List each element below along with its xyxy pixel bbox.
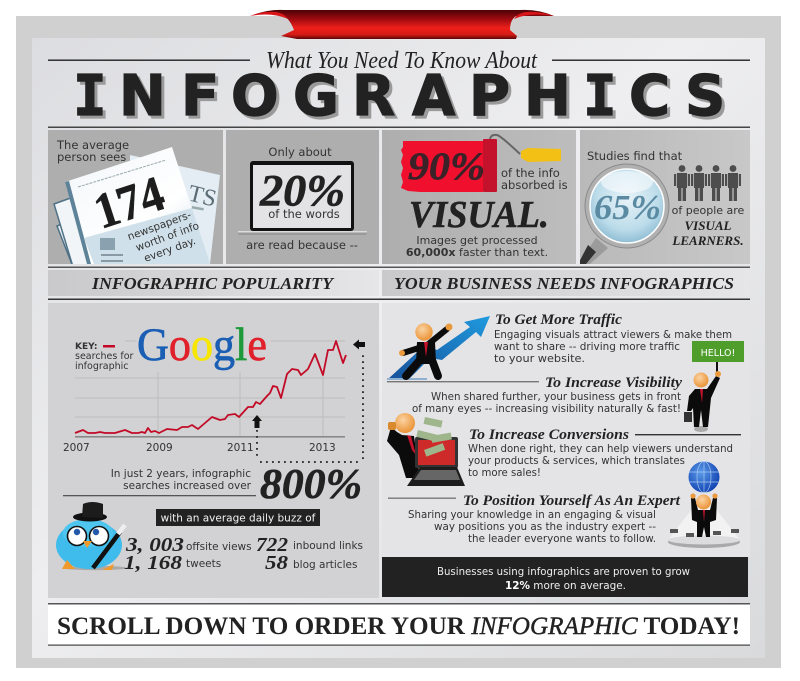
red ribbon bbox=[250, 10, 554, 39]
buzz stats bbox=[124, 534, 363, 574]
panel: visual learners 65%: of people are bbox=[672, 204, 745, 217]
buzz label bbox=[156, 509, 320, 526]
text: to increase conversions: your products & services, which translates bbox=[468, 454, 685, 467]
headline shadow: I bbox=[76, 67, 110, 132]
buzz stats: 722 bbox=[256, 534, 288, 556]
buzz stats: inbound links bbox=[293, 540, 363, 552]
key bbox=[75, 342, 134, 372]
axis labels: 2011 bbox=[227, 442, 254, 454]
20 percent: 20% bbox=[259, 166, 345, 215]
panel: visual 90% bbox=[382, 130, 576, 264]
icon: businessman with hello sign bbox=[684, 341, 744, 432]
axis labels: 2013 bbox=[309, 442, 336, 454]
text: to increase visibility: To Increase Visibility bbox=[545, 375, 682, 391]
icon: laptop: of the words bbox=[268, 207, 340, 221]
buzz stats: 1, 168 bbox=[124, 552, 182, 574]
panel: visual learners 65%: LEARNERS. bbox=[671, 233, 744, 248]
icon: businessman holding globe on stage bbox=[668, 461, 740, 548]
panel: laptop 20% bbox=[226, 130, 379, 264]
text: to increase conversions: To Increase Conversions bbox=[469, 427, 629, 443]
text: to get more traffic: To Get More Traffic bbox=[495, 312, 622, 328]
heading: infographic popularity: INFOGRAPHIC POPULARITY bbox=[91, 274, 335, 293]
google logo: Google bbox=[137, 319, 267, 371]
text: position yourself as an expert: To Position Yourself As An Expert bbox=[463, 493, 681, 509]
call to action banner bbox=[48, 603, 750, 646]
lead text: person sees bbox=[57, 150, 126, 164]
90 percent: 90% bbox=[408, 145, 485, 188]
buzz stats: blog articles bbox=[293, 559, 357, 571]
buzz stats: tweets bbox=[186, 558, 221, 570]
headline: I bbox=[73, 64, 107, 129]
icon: paint roller bbox=[401, 135, 561, 192]
axis labels: 2009 bbox=[146, 442, 173, 454]
icon: businessman with laptop and money bbox=[387, 413, 465, 486]
visual: VISUAL. bbox=[409, 194, 549, 236]
panel: visual 90%: 60,000x faster than text. bbox=[406, 246, 548, 259]
key: searches for bbox=[75, 351, 134, 362]
headline shadow: CS bbox=[632, 67, 728, 132]
text: to get more traffic: to your website. bbox=[494, 352, 585, 365]
buzz stats: 3, 003 bbox=[125, 534, 184, 556]
text: to get more traffic: want to share -- driving more traffic bbox=[494, 340, 680, 353]
text: position yourself as an expert bbox=[388, 493, 681, 545]
newspaper caption: newspapers- bbox=[126, 209, 193, 243]
headline shadow: NFOGRAPH bbox=[122, 67, 574, 132]
panel: visual learners 65%: Studies find that bbox=[587, 149, 683, 163]
headline shadow: I bbox=[586, 67, 620, 132]
buzz label: with an average daily buzz of bbox=[161, 512, 316, 524]
key: infographic bbox=[75, 361, 128, 372]
text: to increase conversions bbox=[468, 427, 741, 479]
panel: visual learners 65% bbox=[578, 130, 750, 264]
text: to increase visibility bbox=[387, 375, 682, 415]
heading: your business needs infographics bbox=[382, 270, 750, 296]
text: to get more traffic bbox=[494, 312, 732, 365]
arrow left bbox=[353, 340, 365, 350]
panel: business needs bbox=[382, 303, 750, 557]
text: to get more traffic: Engaging visuals attract viewers & make them bbox=[494, 328, 732, 341]
growth statement: searches increased over bbox=[123, 480, 252, 492]
800 percent: 800% bbox=[260, 462, 362, 508]
text: position yourself as an expert: way positions you as the industry expert -- bbox=[434, 520, 656, 533]
panel: visual learners 65%: VISUAL bbox=[685, 218, 732, 233]
text: position yourself as an expert: Sharing your knowledge in an engaging & visual bbox=[408, 508, 656, 521]
count: 174 bbox=[87, 165, 171, 239]
newspaper caption: every day. bbox=[142, 235, 197, 265]
headline: CS bbox=[629, 64, 725, 129]
heading: your business needs infographics: YOUR BUSINESS NEEDS INFOGRAPHICS bbox=[394, 274, 734, 293]
icon: four people bbox=[674, 165, 741, 201]
panel: laptop 20%: Only about bbox=[268, 145, 332, 159]
title bbox=[48, 48, 750, 132]
panel: newspapers bbox=[48, 130, 223, 264]
headline: NFOGRAPH bbox=[119, 64, 571, 129]
icon: magnifying glass bbox=[578, 164, 669, 264]
callout: 12 percent growth: 12% more on average. bbox=[505, 580, 626, 592]
text: to increase visibility: When shared further, your business gets in front bbox=[431, 390, 682, 403]
callout: 12 percent growth: Businesses using infographics are proven to grow bbox=[437, 566, 690, 578]
buzz stats: offsite views bbox=[186, 541, 252, 553]
arrow up bbox=[252, 415, 262, 428]
newspaper caption: worth of info bbox=[134, 220, 201, 254]
callout: 12 percent growth bbox=[382, 557, 748, 597]
text: to increase conversions: to more sales! bbox=[468, 466, 541, 479]
icon: laptop bbox=[238, 161, 367, 235]
subtitle: What You Need To Know About bbox=[266, 48, 538, 74]
heading: infographic popularity bbox=[48, 270, 379, 296]
icon: businessman with blue arrow bbox=[387, 316, 490, 380]
line chart bbox=[63, 341, 346, 454]
text: to increase conversions: When done right, they can help viewers understand bbox=[468, 442, 733, 455]
call to action banner: SCROLL DOWN TO ORDER YOUR INFOGRAPHIC TODAY! bbox=[57, 613, 740, 640]
headline: I bbox=[583, 64, 617, 129]
newspaper caption bbox=[128, 214, 198, 262]
panel: visual 90%: Images get processed bbox=[416, 234, 538, 247]
newspaper illustration bbox=[53, 147, 220, 264]
growth statement: In just 2 years, infographic bbox=[111, 468, 251, 480]
key: KEY: bbox=[75, 342, 97, 352]
buzz stats: 58 bbox=[265, 552, 288, 574]
panel: visual 90%: of the info bbox=[501, 166, 560, 180]
lead text: The average bbox=[56, 138, 129, 152]
panel: infographic popularity bbox=[48, 303, 379, 598]
icon: blue bird with top hat and wand bbox=[56, 502, 127, 570]
dotted connector bbox=[252, 340, 365, 462]
text: to increase visibility: of many eyes -- increasing visibility naturally & fast! bbox=[412, 402, 681, 415]
panel: laptop 20%: are read because -- bbox=[246, 238, 358, 252]
65 percent: 65% bbox=[594, 188, 661, 227]
axis labels: 2007 bbox=[63, 442, 90, 454]
axis labels bbox=[63, 442, 336, 454]
text: position yourself as an expert: the leader everyone wants to follow. bbox=[468, 532, 656, 545]
growth statement bbox=[63, 462, 362, 508]
newspaper illustration: TS bbox=[186, 181, 219, 213]
icon: businessman with hello sign: HELLO! bbox=[701, 348, 735, 359]
panel: visual 90%: absorbed is bbox=[501, 178, 568, 192]
